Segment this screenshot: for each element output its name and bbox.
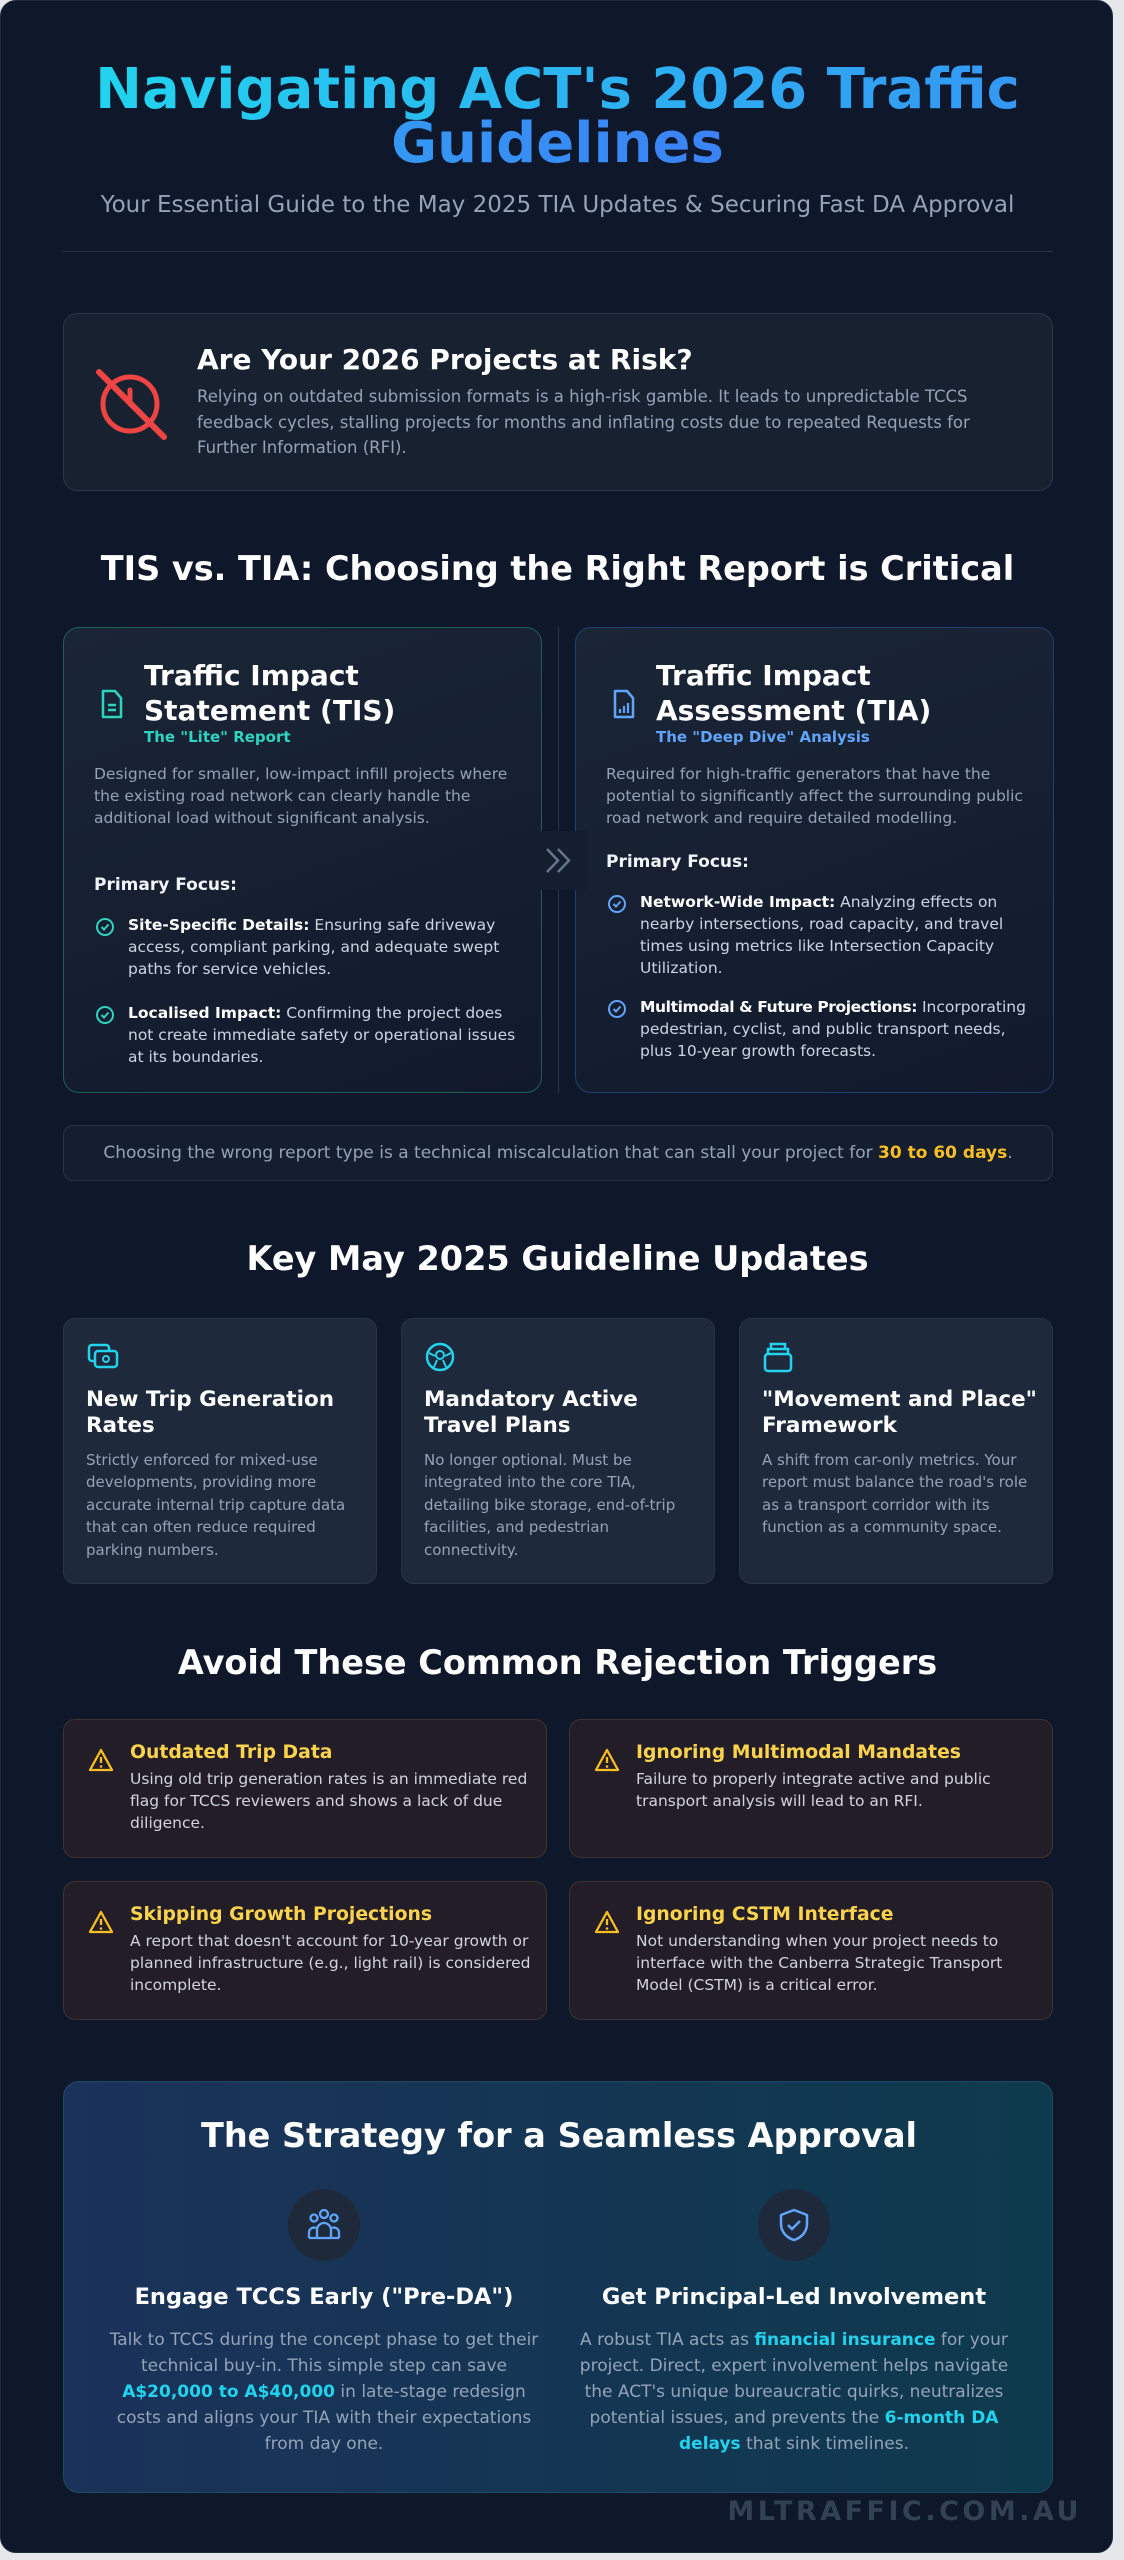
panel: strategy [63,2081,1053,2493]
panel: TIA: Traffic Impact [656,659,871,692]
card: active travel: No longer optional. Must be integrated into the core TIA, detailing bike storage, end-of-trip facilities, and pedestrian connectivity. [424,1451,675,1559]
card: active travel [401,1318,715,1584]
card: growth: Skipping Growth Projections [130,1904,432,1925]
panel: TIA: Primary Focus: [606,852,749,872]
bullet: Multimodal & Future Projections: Incorporating [640,998,1026,1016]
heading: TIS vs TIA: TIS vs. TIA: Choosing the Right Report is Critical [101,549,1014,588]
callout [63,1125,1053,1181]
panel: TIS: Primary Focus: [94,875,237,895]
arrow: chevron [533,831,587,890]
card: active travel: Mandatory Active Travel Plans [424,1387,638,1438]
card: growth [63,1881,547,2020]
icon: stack [764,1342,792,1372]
panel: TIA: Assessment (TIA) [656,694,931,727]
bullet: pedestrian, cyclist, and public transport needs, [640,1020,1006,1038]
bullet: plus 10-year growth forecasts. [640,1042,876,1060]
card: multimodal [569,1719,1053,1858]
icon: people [288,2189,360,2261]
card: trip rates: New Trip Generation Rates [86,1387,334,1438]
card: multimodal: Failure to properly integrate active and public transport analysis will lead to an RFI. [636,1770,991,1810]
subtitle: Your Essential Guide to the May 2025 TIA Updates & Securing Fast DA Approval [101,192,1014,218]
heading: rejection triggers: Avoid These Common Rejection Triggers [178,1643,937,1682]
card: CSTM [569,1881,1053,2020]
heading: Are Your 2026 Projects at Risk? [197,343,693,376]
icon: globe [426,1342,454,1372]
card: CSTM: Not understanding when your project needs to interface with the Canberra Strategic Transport Model (CSTM) is a critical error. [636,1932,1002,1994]
card: trip rates [63,1318,377,1584]
panel: TIA [575,627,1054,1093]
icon: cash [88,1344,118,1368]
title: Navigating ACT's 2026 Traffic [95,57,1020,122]
card: movement and place [739,1318,1053,1584]
heading: updates: Key May 2025 Guideline Updates [246,1239,869,1278]
panel: TIS [63,627,542,1093]
panel: TIA: The "Deep Dive" Analysis [656,728,870,746]
heading: The Strategy for a Seamless Approval [201,2116,917,2155]
column: principal [580,2189,1008,2454]
watermark: MLTRAFFIC.COM.AU [727,2496,1082,2527]
bullet [608,998,1026,1060]
panel: TIA: Required for high-traffic generators that have the potential to significantly affect the surrounding public road network and require detailed modelling. [606,765,1023,827]
callout: Choosing the wrong report type is a technical miscalculation that can stall your project for 30 to 60 days. [103,1143,1013,1163]
title [95,57,1020,176]
icon: document [102,690,122,718]
panel: risk [63,313,1053,491]
card: movement and place: "Movement and Place" Framework [762,1387,1037,1438]
card: outdated trip data [63,1719,547,1858]
bullet: Site-Specific Details: Ensuring safe driveway access, compliant parking, and adequate swept paths for service vehicles. [128,916,499,978]
text: Relying on outdated submission formats is a high-risk gamble. It leads to unpredictable TCCS feedback cycles, stalling projects for months and inflating costs due to repeated Requests for Further Information (RFI). [197,387,970,457]
title: Guidelines [391,111,724,176]
panel: strategy: Get Principal-Led Involvement [602,2284,986,2310]
panel: TIS: Traffic Impact [144,659,359,692]
panel: TIS: Designed for smaller, low-impact infill projects where the existing road network can clearly handle the additional load without significant analysis. [94,765,507,827]
icon: no clock [96,369,167,440]
column: engage [110,2189,538,2454]
card: outdated trip data: Outdated Trip Data [130,1742,332,1763]
bullet: Localised Impact: Confirming the project does not create immediate safety or operational issues at its boundaries. [128,1004,515,1066]
card: movement and place: A shift from car-only metrics. Your report must balance the road's role as a transport corridor with its function as a community space. [762,1451,1027,1536]
bullet: Network-Wide Impact: Analyzing effects on nearby intersections, road capacity, and travel times using metrics like Intersection Capacity Utilization. [640,893,1003,977]
icon: shield [758,2189,830,2261]
panel: strategy: A robust TIA acts as financial insurance for your project. Direct, expert involvement helps navigate the ACT's unique bureaucratic quirks, neutralizes potential issues, and prevents the 6-month DA delays that sink timelines. [580,2330,1008,2454]
panel: strategy: Talk to TCCS during the concept phase to get their technical buy-in. This simple step can save A$20,000 to A$40,000 in late-stage redesign costs and aligns your TIA with their expectations from day one. [110,2330,538,2454]
panel: TIS: Statement (TIS) [144,694,395,727]
icon: chart doc [614,690,634,718]
card: growth: A report that doesn't account for 10-year growth or planned infrastructure (e.g., light rail) is considered incomplete. [130,1932,530,1994]
card: trip rates: Strictly enforced for mixed-use developments, providing more accurate internal trip capture data that can often reduce required parking numbers. [86,1451,345,1559]
panel: strategy: Engage TCCS Early ("Pre-DA") [135,2284,513,2310]
card: multimodal: Ignoring Multimodal Mandates [636,1742,961,1763]
card: CSTM: Ignoring CSTM Interface [636,1904,894,1925]
panel: TIS: The "Lite" Report [144,728,291,746]
card: outdated trip data: Using old trip generation rates is an immediate red flag for TCCS reviewers and shows a lack of due diligence. [130,1770,527,1832]
